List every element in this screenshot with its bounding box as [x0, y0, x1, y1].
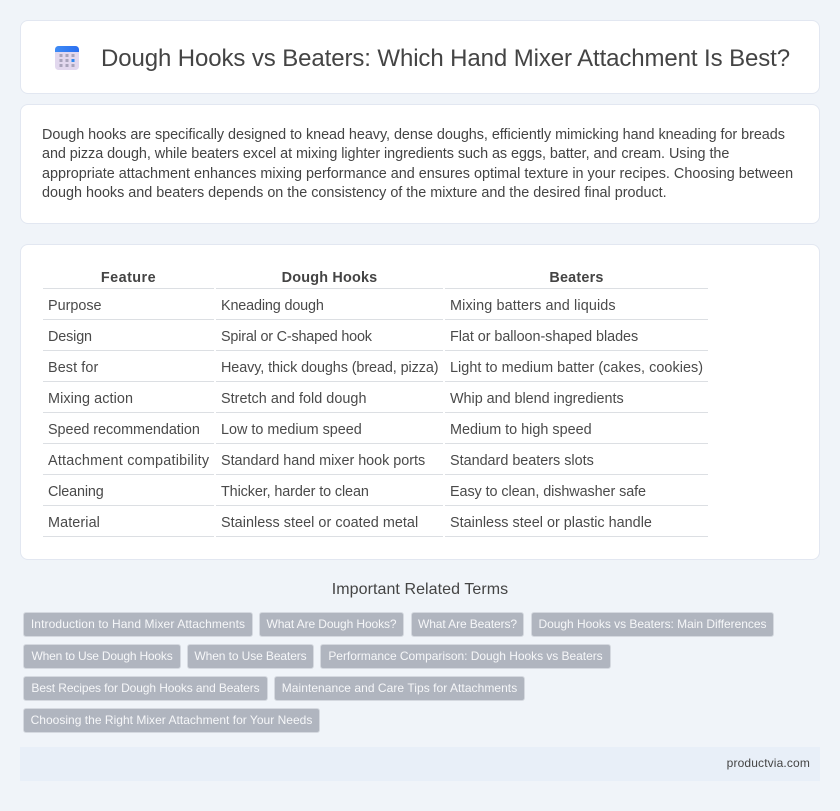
footer source: productvia.com [727, 756, 810, 770]
heading: related terms: Important Related Terms [332, 581, 508, 598]
row: design: Design [48, 329, 92, 345]
table grid lines [43, 288, 708, 537]
icon: calendar [55, 46, 79, 70]
related terms tags: Performance Comparison: Dough Hooks vs Beaters [328, 649, 603, 663]
row: attachment compatibility [48, 453, 594, 469]
table header: Dough Hooks [282, 270, 377, 286]
row: best for [48, 360, 703, 376]
row: best for: Heavy, thick doughs (bread, pizza) [221, 360, 438, 376]
related terms tags: Dough Hooks vs Beaters: Main Differences [538, 617, 767, 631]
panel: comparison table [20, 244, 820, 560]
row: cleaning: Thicker, harder to clean [221, 484, 369, 500]
related terms tags [23, 612, 774, 733]
intro text: Dough hooks are specifically designed to knead heavy, dense doughs, efficiently mimicking hand kneading for breads [42, 127, 785, 143]
row: purpose: Mixing batters and liquids [450, 298, 616, 314]
title: Dough Hooks vs Beaters: Which Hand Mixer Attachment Is Best? [101, 45, 790, 72]
table header [101, 270, 604, 286]
row: mixing action: Mixing action [48, 391, 133, 407]
related terms tags: Maintenance and Care Tips for Attachments [282, 681, 517, 695]
panel: title [20, 20, 820, 94]
footer [20, 747, 820, 781]
row: design [48, 329, 638, 345]
row: material: Material [48, 515, 100, 531]
row: mixing action: Stretch and fold dough [221, 391, 366, 407]
row: mixing action [48, 391, 624, 407]
related terms tags: What Are Dough Hooks? [266, 617, 396, 631]
row: best for: Light to medium batter (cakes, cookies) [450, 360, 703, 376]
intro text: appropriate attachment enhances mixing performance and ensures optimal texture in your recipes. Choosing between [42, 166, 793, 182]
row: purpose [48, 298, 616, 314]
row: material: Stainless steel or coated metal [221, 515, 418, 531]
row: cleaning: Easy to clean, dishwasher safe [450, 484, 646, 500]
panel: introduction [20, 104, 820, 224]
related terms tags: When to Use Beaters [194, 649, 307, 663]
intro text [42, 127, 793, 201]
row: material [48, 515, 652, 531]
row: best for: Best for [48, 360, 98, 376]
intro text: dough hooks and beaters depends on the consistency of the mixture and the desired final product. [42, 185, 667, 201]
row: speed recommendation: Speed recommendation [48, 422, 200, 438]
table header: Feature [101, 270, 156, 286]
row: attachment compatibility: Standard beaters slots [450, 453, 594, 469]
row: cleaning [48, 484, 646, 500]
row: purpose: Kneading dough [221, 298, 324, 314]
related terms tags: Best Recipes for Dough Hooks and Beaters [31, 681, 260, 695]
intro text: and pizza dough, while beaters excel at mixing lighter ingredients such as eggs, batter, and cream. Using the [42, 146, 729, 162]
row: cleaning: Cleaning [48, 484, 104, 500]
related terms tags: Choosing the Right Mixer Attachment for Your Needs [31, 713, 312, 727]
row: design: Spiral or C-shaped hook [221, 329, 372, 345]
related terms tags: What Are Beaters? [418, 617, 517, 631]
row: attachment compatibility: Standard hand mixer hook ports [221, 453, 425, 469]
row: design: Flat or balloon-shaped blades [450, 329, 638, 345]
row: purpose: Purpose [48, 298, 102, 314]
row: material: Stainless steel or plastic handle [450, 515, 652, 531]
row: speed recommendation: Low to medium speed [221, 422, 362, 438]
row: attachment compatibility: Attachment compatibility [48, 453, 209, 469]
row: mixing action: Whip and blend ingredients [450, 391, 624, 407]
related terms tags: Introduction to Hand Mixer Attachments [31, 617, 245, 631]
row: speed recommendation: Medium to high speed [450, 422, 592, 438]
table header: Beaters [549, 270, 604, 286]
row: speed recommendation [48, 422, 592, 438]
related terms tags: When to Use Dough Hooks [31, 649, 173, 663]
